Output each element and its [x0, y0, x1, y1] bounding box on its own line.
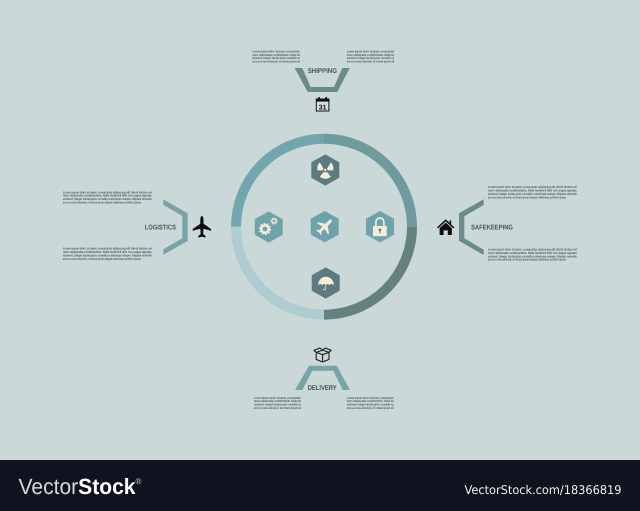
text block: logistics top: Lorem ipsum dolor sit amet, consectetur adipiscing elit. Morbi dictum vel [63, 190, 152, 194]
panel: logistics [63, 190, 211, 261]
text block: delivery left: euismod. Integer lacinia justo convallis sc [254, 402, 301, 406]
text block: delivery right: nunc malesuada condimentum. Nulla he [347, 399, 394, 403]
icon: umbrella hexagon [312, 267, 340, 299]
text block: shipping left: nunc malesuada condimentum. Nulla he [252, 53, 300, 57]
text block: shipping left: Lorem ipsum dolor sit amet, consectetur [252, 49, 301, 53]
bracket: safekeeping [459, 199, 484, 255]
footer registered mark: ® [136, 477, 142, 486]
text block: delivery left: Lorem ipsum dolor sit amet, consectetur [254, 396, 302, 400]
text block: logistics top: euismod. Integer lacinia justo convallis scelerisque semper. Aliquam molestie [63, 197, 152, 201]
panel: shipping [252, 49, 395, 111]
text block: logistics bottom: nunc malesuada condimentum. Nulla hendrerit felis non augue egestas [63, 250, 152, 254]
footer bar [0, 460, 640, 511]
panel: delivery [254, 348, 394, 410]
text block: shipping right [347, 49, 395, 63]
text block: delivery left: arcu ac urna euismod, et ornare ipsum ali [254, 406, 301, 410]
text block: logistics bottom [63, 247, 152, 261]
text block: shipping left [252, 49, 301, 63]
heading: shipping: SHIPPING [308, 68, 337, 75]
icon: open box [314, 348, 331, 362]
text block: logistics top [63, 190, 152, 204]
text block: logistics top: arcu ac urna euismod, et ornare ipsum aliquet. Maecenas porttitor ipsum [63, 200, 141, 204]
text block: shipping right: arcu ac urna euismod, et ornare ipsum ali [347, 59, 394, 63]
icon: gears hexagon [255, 211, 283, 243]
icon: house [437, 219, 454, 235]
heading: delivery: DELIVERY [308, 385, 337, 392]
text block: shipping left: arcu ac urna euismod, et ornare ipsum ali [252, 59, 300, 63]
text block: safekeeping bottom: Lorem ipsum dolor sit amet, consectetur adipiscing elit. Morbi dictum vel [488, 248, 577, 252]
footer logo: VectorStock [18, 474, 136, 499]
text block: logistics top: nunc malesuada condimentum. Nulla hendrerit felis non augue egestas [63, 194, 152, 198]
icon: padlock hexagon [366, 211, 394, 242]
text block: logistics bottom: arcu ac urna euismod, et ornare ipsum aliquet. Maecenas porttitor ipsum [63, 257, 141, 261]
text block: safekeeping top: euismod. Integer lacinia justo convallis scelerisque semper. Aliquam molestie [488, 192, 577, 196]
icon: airplane hexagon [311, 211, 339, 242]
text block: safekeeping bottom: nunc malesuada condimentum. Nulla hendrerit felis non augue egestas [488, 251, 577, 255]
icon: airplane [193, 216, 211, 238]
text block: safekeeping bottom [488, 248, 577, 262]
text block: shipping right: euismod. Integer lacinia justo convallis sc [347, 56, 394, 60]
text block: safekeeping top: nunc malesuada condimentum. Nulla hendrerit felis non augue egestas [488, 188, 577, 192]
text block: shipping right: Lorem ipsum dolor sit amet, consectetur [347, 49, 395, 53]
icon: calendar [316, 97, 329, 111]
text block: delivery right [347, 396, 394, 410]
text block: delivery right: euismod. Integer lacinia justo convallis sc [347, 402, 394, 406]
text block: shipping left: euismod. Integer lacinia justo convallis sc [252, 56, 300, 60]
text block: delivery right: Lorem ipsum dolor sit amet, consectetur [347, 396, 394, 400]
text block: shipping right: nunc malesuada condimentum. Nulla he [347, 53, 394, 57]
bracket: logistics [163, 199, 188, 255]
text block: safekeeping top [488, 185, 577, 199]
text block: delivery right: arcu ac urna euismod, et ornare ipsum ali [347, 406, 394, 410]
text block: safekeeping bottom: arcu ac urna euismod, et ornare ipsum aliquet. Maecenas porttitor ipsum [488, 258, 566, 262]
text block: logistics bottom: Lorem ipsum dolor sit amet, consectetur adipiscing elit. Morbi dictum vel [63, 247, 152, 251]
text block: safekeeping top: Lorem ipsum dolor sit amet, consectetur adipiscing elit. Morbi dictum vel [488, 185, 577, 189]
footer image id: VectorStock.com/18366819 [464, 483, 622, 497]
icon: radiation hexagon [311, 154, 339, 186]
text block: delivery left: nunc malesuada condimentum. Nulla he [254, 399, 301, 403]
bracket: shipping [295, 68, 350, 92]
text block: delivery left [254, 396, 302, 410]
heading: safekeeping: SAFEKEEPING [471, 224, 513, 232]
text block: logistics bottom: euismod. Integer lacinia justo convallis scelerisque semper. Aliquam molestie [63, 253, 152, 257]
bracket: delivery [295, 366, 350, 390]
text block: safekeeping bottom: euismod. Integer lacinia justo convallis scelerisque semper. Aliquam molestie [488, 254, 577, 258]
icon: calendar: 31 [319, 104, 327, 111]
text block: safekeeping top: arcu ac urna euismod, et ornare ipsum aliquet. Maecenas porttitor ipsum [488, 195, 566, 199]
panel: safekeeping [437, 185, 577, 262]
heading: logistics: LOGISTICS [145, 224, 176, 232]
ring chart: four segments [236, 139, 412, 315]
